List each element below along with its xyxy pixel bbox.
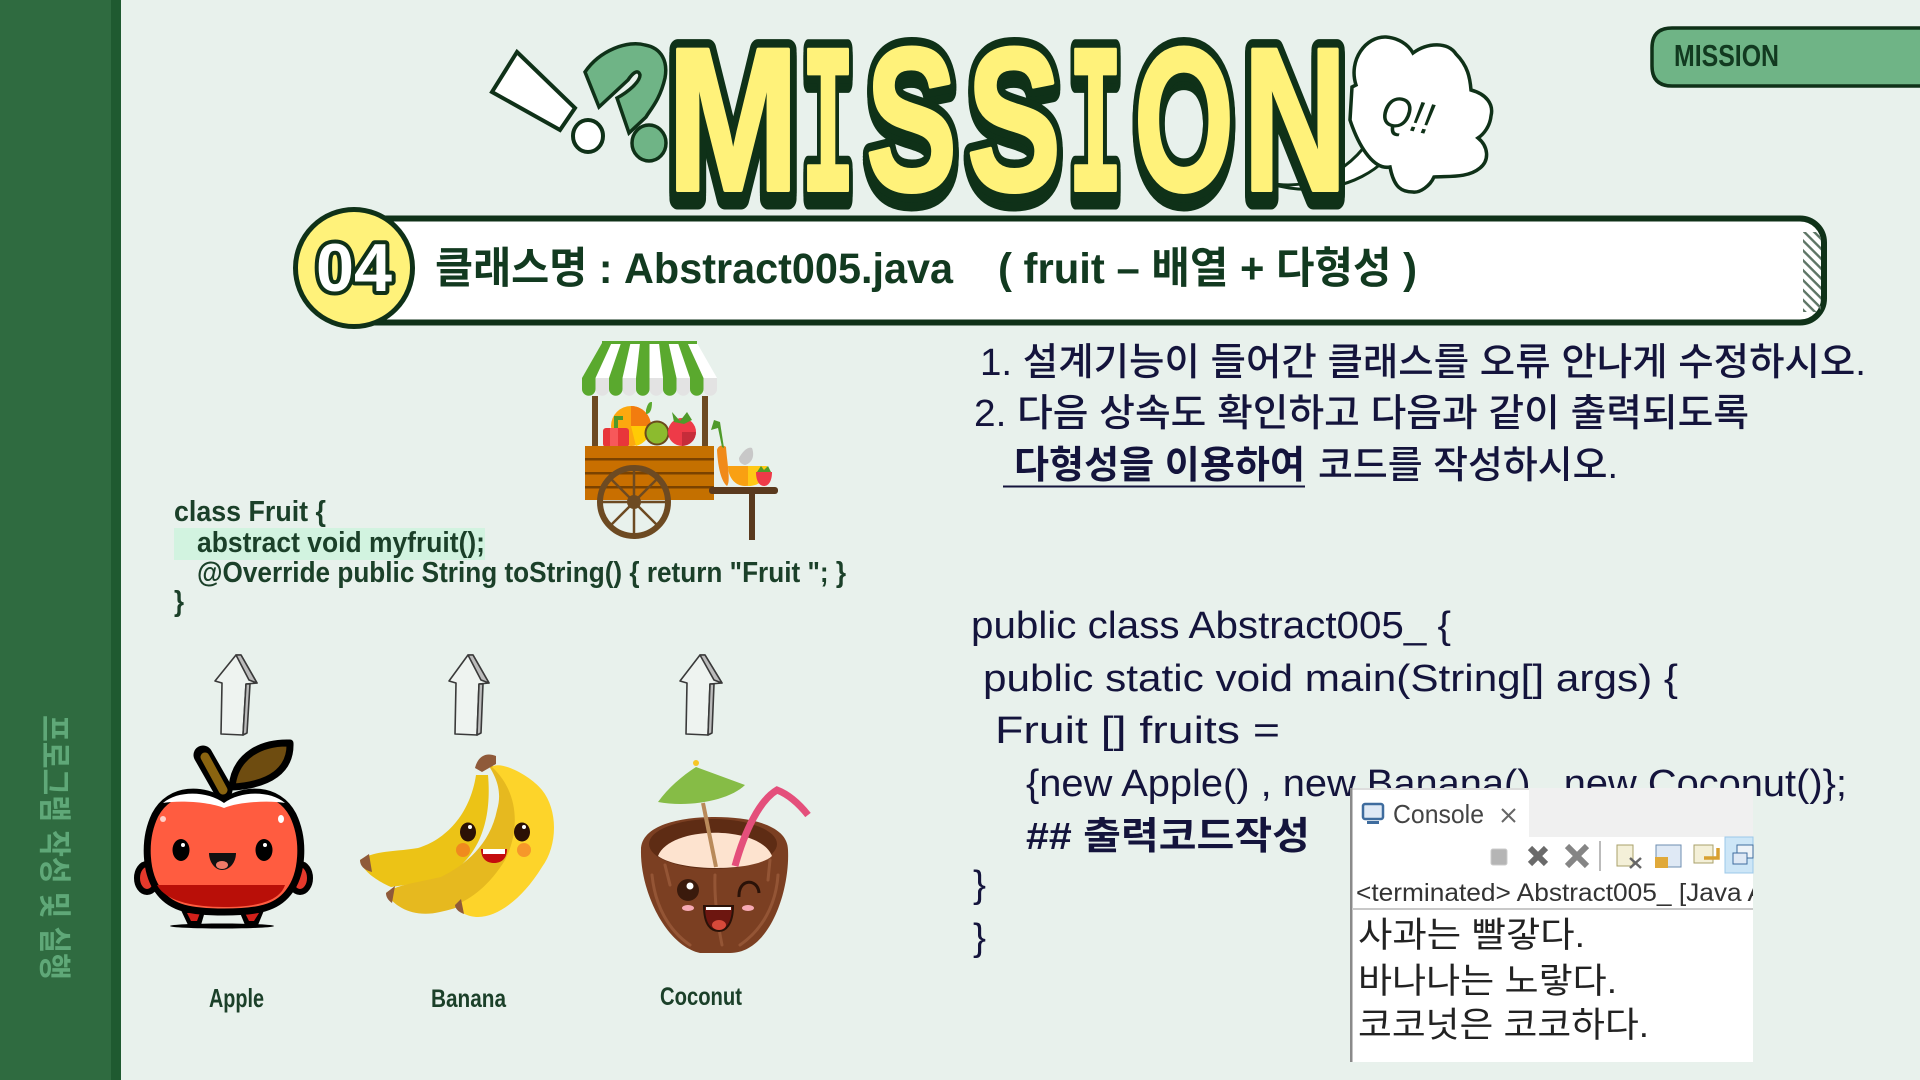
- arrow: banana to fruit: [449, 655, 489, 735]
- top-right tab: MISSION: MISSION: [1674, 38, 1779, 73]
- console output: 코코넛은 코코하다.: [1358, 1006, 1649, 1045]
- code block: Fruit class: class Fruit {: [174, 496, 326, 528]
- icon: question mark: [585, 44, 666, 161]
- code block: Fruit class: abstract void myfruit();: [197, 527, 485, 559]
- top-right tab: MISSION: [1652, 28, 1920, 86]
- title: MISSION: N: [1243, 6, 1347, 234]
- title: MISSION: S: [866, 6, 957, 234]
- title: MISSION: I: [1068, 13, 1123, 254]
- instructions: 다형성을 이용하여: [1014, 445, 1305, 487]
- arrow: apple to fruit: [215, 655, 257, 735]
- instructions: 코드를 작성하시오.: [1318, 445, 1618, 487]
- console window: [1350, 788, 1765, 1062]
- code block: main method: public static void main(String[] args) {: [983, 658, 1678, 700]
- code block: Fruit class: [174, 496, 846, 618]
- code block: main method: public class Abstract005_ {: [971, 605, 1451, 647]
- title: MISSION: S: [967, 6, 1061, 234]
- instructions: 1. 설계기능이 들어간 클래스를 오류 안나게 수정하시오.: [980, 342, 1866, 384]
- heading text: topic: ( fruit – 배열 + 다형성 ): [998, 245, 1417, 293]
- title: MISSION: I: [801, 13, 855, 254]
- label: Coconut: Coconut: [660, 983, 743, 1011]
- title: MISSION: S: [967, 6, 1061, 234]
- character: apple: [137, 743, 310, 928]
- number badge: 04: [316, 230, 392, 306]
- title graphic: [492, 6, 1492, 254]
- code block: Fruit class: }: [174, 586, 184, 618]
- console output: 사과는 빨갛다.: [1358, 916, 1585, 955]
- title: MISSION: [667, 6, 1347, 254]
- heading text: class name: 클래스명 : Abstract005.java: [435, 245, 954, 293]
- arrow: coconut to fruit: [680, 655, 722, 735]
- console tab title: Console: [1393, 799, 1484, 829]
- title: MISSION: N: [1243, 6, 1347, 234]
- title: MISSION: M: [667, 6, 799, 234]
- title: MISSION: M: [667, 6, 799, 234]
- code block: main method: Fruit [] fruits =: [995, 710, 1280, 752]
- title: MISSION: I: [1068, 13, 1123, 254]
- title: MISSION: O: [1134, 6, 1234, 234]
- instructions: 2. 다음 상속도 확인하고 다음과 같이 출력되도록: [974, 393, 1749, 435]
- code block: main method: [971, 605, 1847, 959]
- icon: close tab: [1502, 809, 1515, 822]
- console status line: <terminated> Abstract005_ [Java A: [1356, 879, 1765, 907]
- illustration: fruit cart: [582, 341, 778, 540]
- character: banana: [360, 754, 554, 917]
- title: MISSION: S: [866, 6, 957, 234]
- icon: exclamation mark: [492, 52, 603, 152]
- heading bar: [296, 210, 1824, 326]
- title: MISSION: O: [1134, 6, 1234, 234]
- sidebar: [0, 0, 121, 1080]
- icon: console monitor: [1363, 804, 1383, 824]
- code block: main method: ## 출력코드작성: [1026, 816, 1310, 858]
- title: MISSION: I: [801, 13, 855, 254]
- console output: 바나나는 노랗다.: [1358, 962, 1617, 1001]
- icon: speech bubble: [1260, 37, 1492, 192]
- code block: main method: }: [973, 864, 986, 906]
- instructions: [974, 342, 1866, 488]
- code block: main method: }: [973, 917, 986, 959]
- character: coconut: [641, 760, 808, 953]
- number badge: [296, 210, 412, 326]
- console output: [1358, 916, 1649, 1045]
- code block: Fruit class: @Override public String toString() { return "Fruit "; }: [197, 557, 846, 589]
- label: Apple: Apple: [209, 983, 264, 1013]
- code block: main method: {new Apple() , new Banana() , new Coconut()};: [1026, 763, 1847, 805]
- sidebar label: 프로그램 작성 및 실행: [36, 715, 73, 980]
- console toolbar: [1491, 837, 1753, 873]
- bubble text: Q!!: [1377, 86, 1438, 145]
- label: Banana: Banana: [431, 985, 507, 1013]
